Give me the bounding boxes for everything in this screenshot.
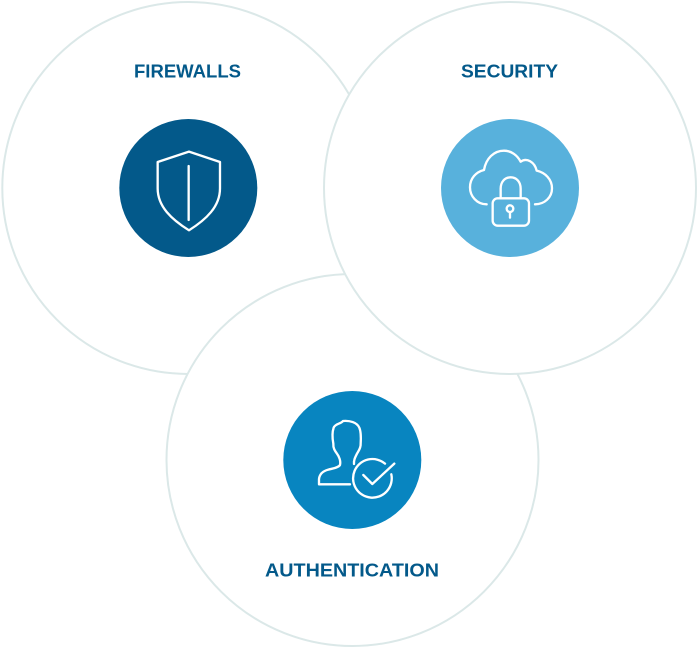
icon: user with check mark: [283, 391, 421, 529]
panel: firewalls: [2, 2, 374, 374]
panel: security: [324, 2, 696, 374]
icon: shield: [119, 119, 257, 257]
panel: authentication: [166, 274, 538, 646]
heading: authentication: AUTHENTICATION: [265, 560, 439, 580]
heading: security: SECURITY: [461, 62, 558, 82]
heading: firewalls: FIREWALLS: [134, 62, 241, 82]
icon: cloud with padlock: [441, 119, 579, 257]
